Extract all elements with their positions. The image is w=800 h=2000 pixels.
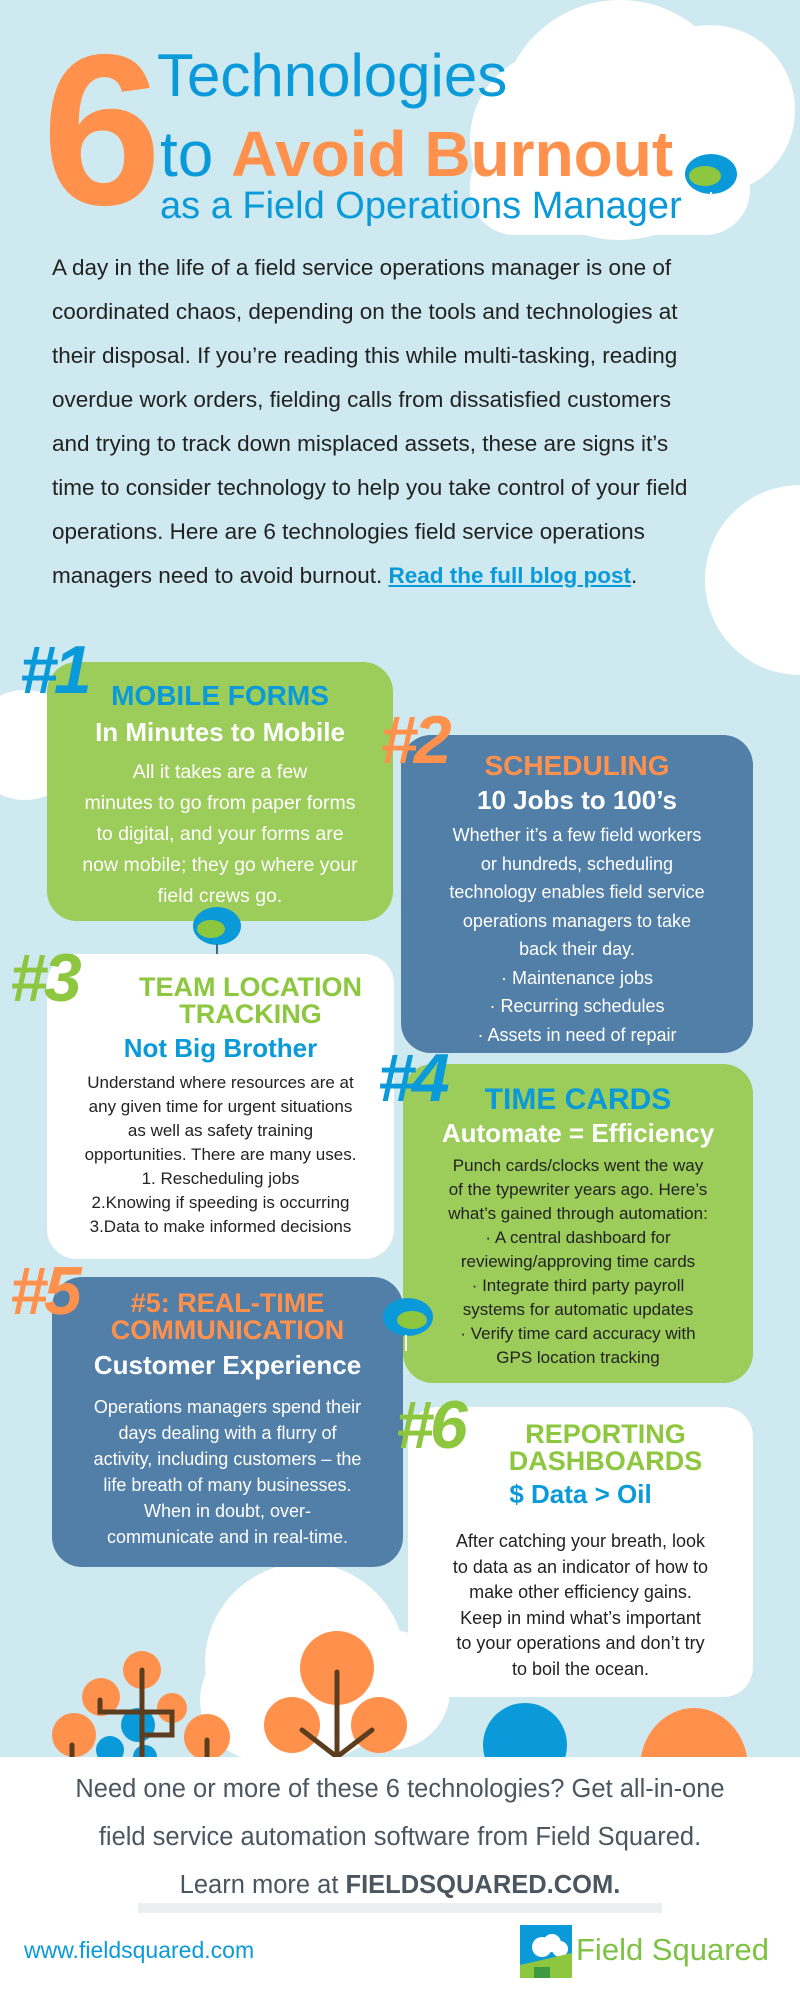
panel: 3 team location: Understand where resources are at <box>87 1073 354 1092</box>
panel: 3 team location: Not Big Brother <box>124 1033 317 1063</box>
panel: 3 team location: 1. Rescheduling jobs <box>142 1169 299 1188</box>
panel: 3 team location: 2.Knowing if speeding is occurring <box>92 1193 349 1212</box>
label #4: #4 <box>378 1040 446 1116</box>
panel: 5 real-time communication: communicate and in real-time. <box>107 1527 348 1547</box>
intro paragraph: overdue work orders, fielding calls from dissatisfied customers <box>52 387 671 412</box>
panel: 2 scheduling: technology enables field service <box>449 882 705 902</box>
panel: 3 team location: TEAM LOCATION <box>139 972 362 1002</box>
label #6: #6 <box>396 1387 464 1463</box>
icon: bird top <box>685 154 737 194</box>
icon: bird panel 4 <box>383 1298 433 1351</box>
panel: 6 reporting dashboards: to boil the ocean. <box>512 1658 649 1678</box>
title <box>42 9 682 250</box>
panel: 3 team location <box>47 954 394 1259</box>
panel: 3 team location: TRACKING <box>179 999 322 1029</box>
panel: 2 scheduling: · Recurring schedules <box>489 996 665 1016</box>
panel: 2 scheduling: · Maintenance jobs <box>501 968 653 988</box>
intro paragraph <box>52 255 687 588</box>
big number 6: 6 <box>42 9 162 250</box>
panel: 2 scheduling: · Assets in need of repair <box>477 1024 677 1044</box>
website url: www.fieldsquared.com <box>24 1937 254 1963</box>
panel: 6 reporting dashboards: $ Data > Oil <box>509 1479 652 1509</box>
panel: 4 time cards: systems for automatic updates <box>463 1300 693 1319</box>
panel: 2 scheduling: back their day. <box>519 939 635 959</box>
panel: 6 reporting dashboards: DASHBOARDS <box>509 1446 702 1476</box>
panel: 4 time cards: of the typewriter years ago. Here’s <box>449 1180 707 1199</box>
panel: 4 time cards: Punch cards/clocks went the way <box>453 1156 703 1175</box>
panel: 2 scheduling: SCHEDULING <box>484 750 670 781</box>
panel: 2 scheduling: operations managers to take <box>463 910 691 930</box>
panel: 4 time cards: · A central dashboard for <box>485 1228 671 1247</box>
label #1: #1 <box>20 632 88 708</box>
panel: 6 reporting dashboards: Keep in mind what’s important <box>460 1608 701 1628</box>
panel: 1 mobile forms: minutes to go from paper forms <box>85 792 355 814</box>
panel: 6 reporting dashboards: REPORTING <box>525 1419 686 1449</box>
panel: 5 real-time communication: activity, including customers – the <box>94 1449 361 1469</box>
panel: 5 real-time communication: When in doubt, over- <box>144 1501 311 1521</box>
call to action text: Learn more at FIELDSQUARED.COM. <box>180 1871 620 1899</box>
intro paragraph: their disposal. If you’re reading this while multi-tasking, reading <box>52 343 677 368</box>
panel: 5 real-time communication <box>52 1277 403 1567</box>
panel: 2 scheduling: 10 Jobs to 100’s <box>477 785 677 815</box>
logo: Field Squared <box>576 1932 769 1967</box>
call to action text: field service automation software from Field Squared. <box>99 1823 701 1851</box>
intro paragraph: managers need to avoid burnout. Read the full blog post. <box>52 563 637 588</box>
panel: 4 time cards: GPS location tracking <box>496 1348 660 1367</box>
panel: 4 time cards <box>403 1064 753 1383</box>
panel: 4 time cards: · Integrate third party payroll <box>472 1276 684 1295</box>
label #5: #5 <box>10 1253 78 1329</box>
panel: 6 reporting dashboards: to data as an indicator of how to <box>453 1556 708 1576</box>
panel: 3 team location: 3.Data to make informed decisions <box>90 1217 351 1236</box>
panel: 4 time cards: Automate = Efficiency <box>442 1118 714 1148</box>
intro paragraph: operations. Here are 6 technologies field service operations <box>52 519 645 544</box>
call to action text <box>75 1775 725 1899</box>
panel: 2 scheduling: Whether it’s a few field workers <box>453 825 701 845</box>
label #2: #2 <box>380 702 448 778</box>
panel: 5 real-time communication: #5: REAL-TIME <box>131 1288 324 1318</box>
icon: bird panel 1 <box>193 907 241 954</box>
title: Technologies <box>157 42 507 109</box>
panel: 1 mobile forms: MOBILE FORMS <box>111 680 329 711</box>
panel: 2 scheduling: or hundreds, scheduling <box>481 854 673 874</box>
intro paragraph: coordinated chaos, depending on the tools and technologies at <box>52 299 677 324</box>
panel: 1 mobile forms: now mobile; they go where your <box>82 854 358 876</box>
panel: 5 real-time communication: COMMUNICATION <box>111 1315 344 1345</box>
panel: 3 team location: any given time for urgent situations <box>89 1097 352 1116</box>
panel: 3 team location: as well as safety training <box>128 1121 313 1140</box>
logo <box>520 1925 769 1978</box>
panel: 5 real-time communication: Operations managers spend their <box>94 1397 361 1417</box>
panel: 1 mobile forms: field crews go. <box>158 885 282 907</box>
panel: 3 team location: opportunities. There are many uses. <box>85 1145 356 1164</box>
title: to Avoid Burnout <box>160 118 673 190</box>
panel: 6 reporting dashboards: to your operations and don’t try <box>456 1633 705 1653</box>
title: as a Field Operations Manager <box>160 185 682 227</box>
panel: 4 time cards: · Verify time card accuracy with <box>460 1324 696 1343</box>
panel: 2 scheduling <box>401 735 753 1053</box>
panel: 1 mobile forms <box>47 662 393 921</box>
call to action text: Need one or more of these 6 technologies? Get all-in-one <box>75 1775 725 1803</box>
panel: 4 time cards: TIME CARDS <box>485 1083 671 1116</box>
trees <box>52 1631 748 1757</box>
intro paragraph: A day in the life of a field service operations manager is one of <box>52 255 671 280</box>
panel: 1 mobile forms: to digital, and your forms are <box>96 823 344 845</box>
panel: 5 real-time communication: life breath of many businesses. <box>103 1475 352 1495</box>
panel: 1 mobile forms: All it takes are a few <box>133 761 307 783</box>
panel: 6 reporting dashboards: make other efficiency gains. <box>469 1582 692 1602</box>
label #3: #3 <box>10 940 78 1016</box>
panel: 5 real-time communication: Customer Experience <box>94 1350 361 1380</box>
panel: 6 reporting dashboards <box>408 1407 753 1697</box>
panel: 4 time cards: reviewing/approving time cards <box>461 1252 695 1271</box>
intro paragraph: time to consider technology to help you take control of your field <box>52 475 687 500</box>
panel: 4 time cards: what’s gained through automation: <box>448 1204 708 1223</box>
panel: 6 reporting dashboards: After catching your breath, look <box>456 1531 705 1551</box>
panel: 1 mobile forms: In Minutes to Mobile <box>95 717 345 747</box>
footer band <box>0 1757 800 2000</box>
panel: 5 real-time communication: days dealing with a flurry of <box>118 1423 337 1443</box>
intro paragraph: and trying to track down misplaced assets, these are signs it’s <box>52 431 668 456</box>
